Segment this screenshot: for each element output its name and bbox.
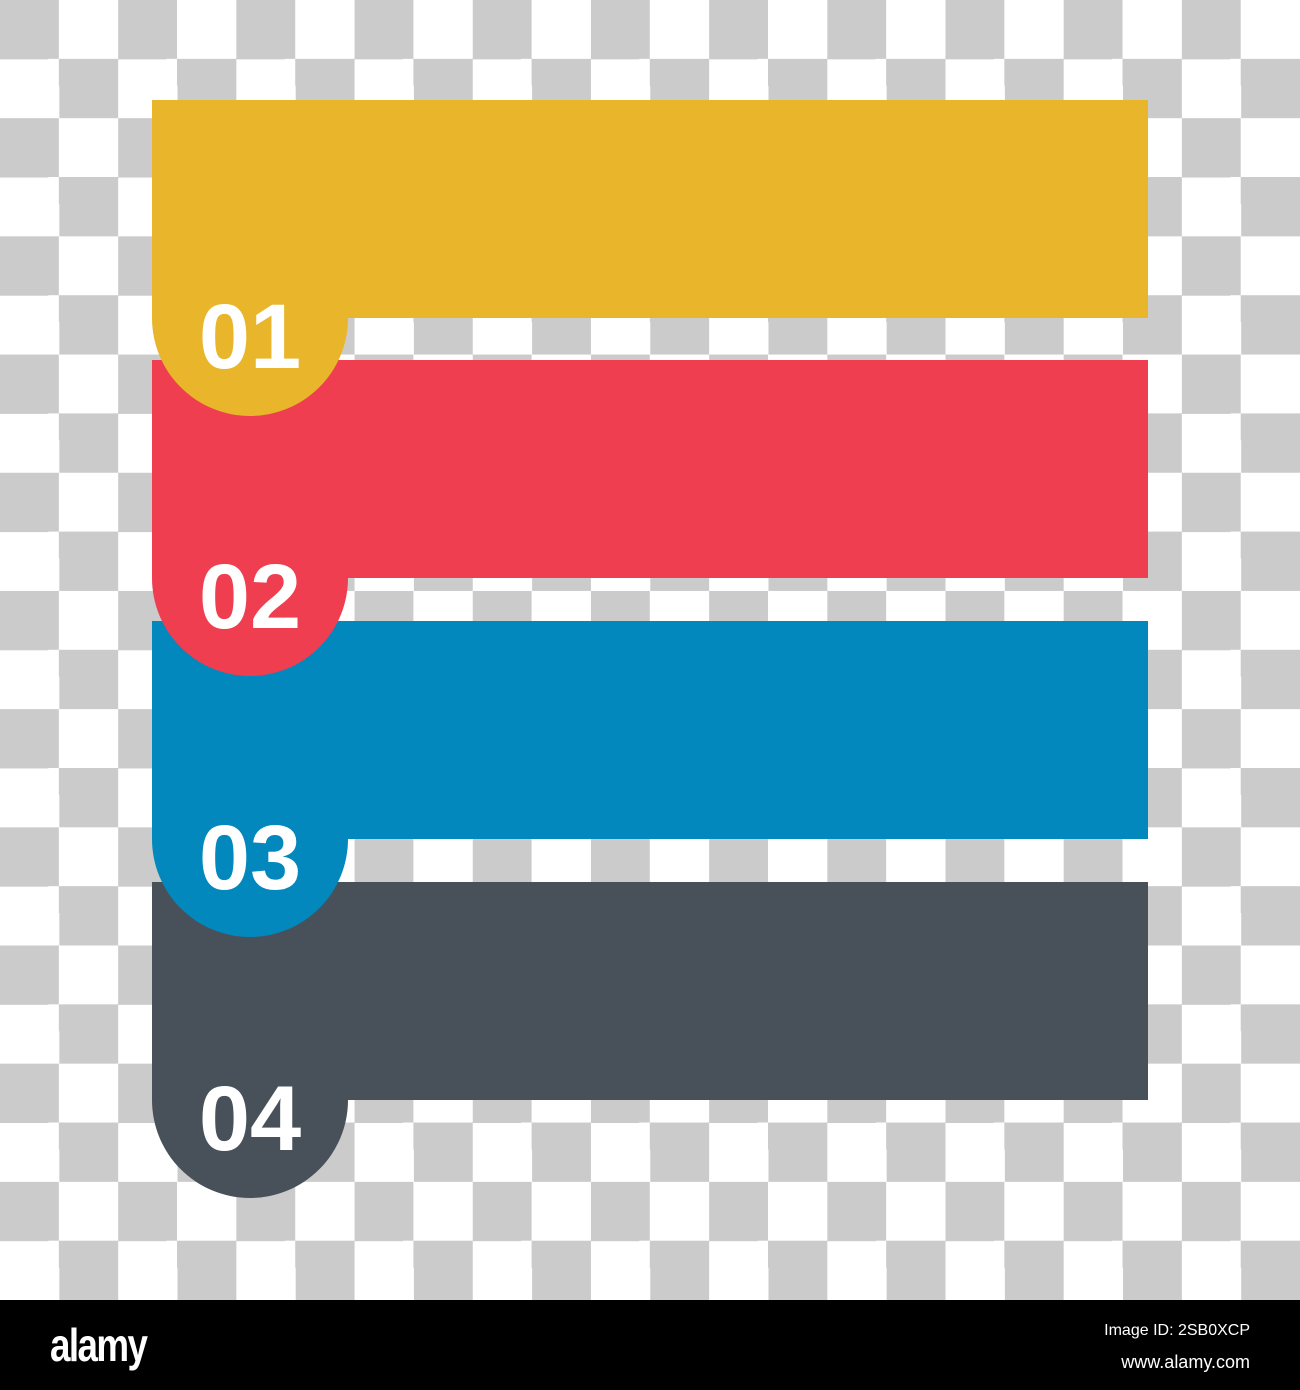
number 01: 01 bbox=[199, 286, 301, 388]
bar 03 bbox=[152, 621, 1148, 839]
tab 03 bbox=[152, 621, 348, 937]
bar 02 bbox=[152, 360, 1148, 578]
footer logo: alamy bbox=[50, 1319, 146, 1371]
url: www.alamy.com bbox=[1121, 1352, 1250, 1372]
bar 04 bbox=[152, 882, 1148, 1100]
tab 04 bbox=[152, 882, 348, 1198]
item 02 bbox=[152, 360, 1148, 676]
number 02: 02 bbox=[199, 546, 301, 648]
number 03: 03 bbox=[199, 807, 301, 909]
footer bbox=[0, 1300, 1300, 1390]
item 04 bbox=[152, 882, 1148, 1198]
item 03 bbox=[152, 621, 1148, 937]
image id: Image ID: 2SB0XCP bbox=[1104, 1322, 1250, 1339]
bar 01 bbox=[152, 100, 1148, 318]
number 04: 04 bbox=[199, 1068, 301, 1170]
item 01 bbox=[152, 100, 1148, 416]
tab 01 bbox=[152, 100, 348, 416]
tab 02 bbox=[152, 360, 348, 676]
